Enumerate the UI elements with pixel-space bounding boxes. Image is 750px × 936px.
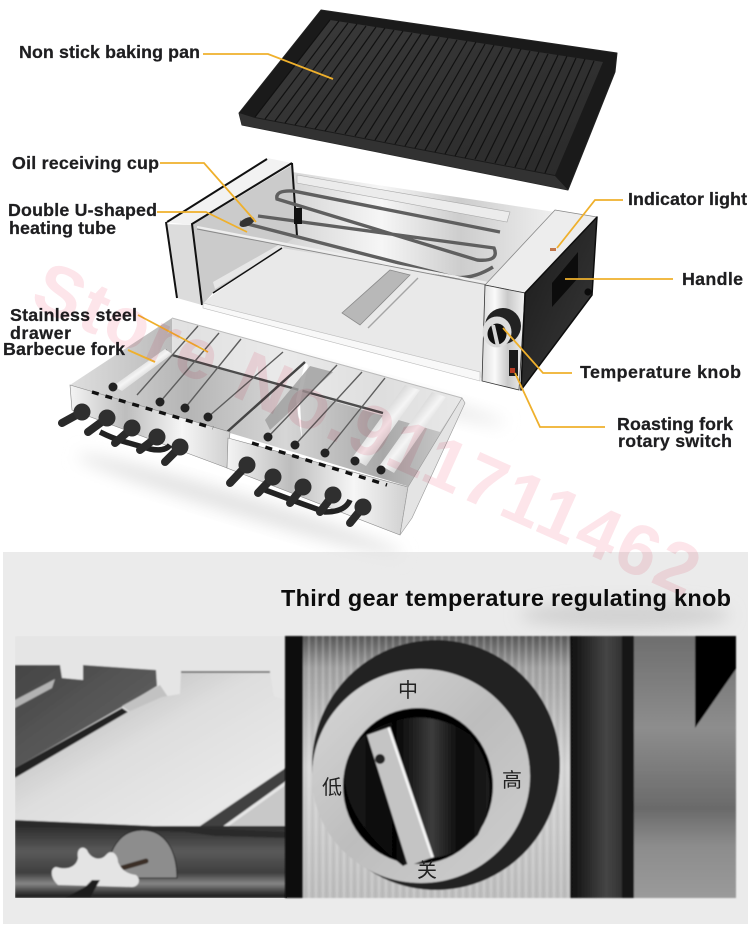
label: oil receiving cup: Oil receiving cup: [12, 153, 159, 173]
photo: temperature knob close-up: [285, 636, 736, 898]
rotary switch: [509, 350, 518, 376]
rollers: [352, 385, 420, 466]
section heading: Third gear temperature regulating knob: [281, 585, 731, 611]
drawer back plate: [172, 318, 462, 432]
label: double U-shaped heating tube: Double U-shaped: [8, 200, 157, 220]
icon: grill body: [165, 158, 597, 432]
fork chains: [100, 432, 350, 512]
label: roasting fork rotary switch: rotary switch: [618, 431, 732, 451]
icon: non stick baking pan: [239, 10, 617, 190]
knob base: [312, 640, 560, 890]
label: temperature knob: Temperature knob: [580, 362, 741, 382]
right control block: [485, 210, 597, 293]
front rail: [203, 303, 480, 381]
label: roasting fork rotary switch: Roasting fork: [617, 414, 733, 434]
fork handles: [62, 412, 363, 523]
knob settings: 高: [502, 764, 522, 793]
label: double U-shaped heating tube: heating tube: [9, 218, 116, 238]
label: handle: Handle: [682, 269, 743, 289]
label: non stick baking pan: Non stick baking pan: [19, 42, 200, 62]
handle slot: [552, 252, 578, 307]
knob settings: 低: [322, 771, 342, 800]
indicator light: [550, 248, 556, 251]
gear wheel: [52, 848, 139, 887]
knob settings: [322, 674, 522, 883]
left end wall: [192, 165, 297, 305]
label: stainless steel drawer: [10, 305, 137, 343]
label: stainless steel drawer: drawer: [10, 323, 71, 343]
watermark: Store No.911711462: [21, 247, 712, 612]
callout lines: [128, 54, 673, 427]
photo: drawer gear close-up: [15, 664, 287, 898]
left end frame: [165, 158, 292, 225]
small knob: [482, 308, 521, 348]
back wall: [240, 172, 555, 290]
forks: [113, 326, 385, 453]
label: indicator light: Indicator light: [628, 189, 747, 209]
heating tubes: [240, 191, 500, 278]
drawer floor: [70, 318, 462, 487]
front plates: [70, 385, 230, 468]
label: stainless steel drawer: Stainless steel: [10, 305, 137, 325]
label: double U-shaped heating tube: [8, 200, 157, 238]
icon: drawer and barbecue forks: [62, 318, 465, 564]
knob grip: [345, 718, 490, 866]
label: barbecue fork: Barbecue fork: [3, 339, 125, 359]
knob settings: 关: [417, 854, 437, 883]
panel: temperature knob section: [3, 552, 748, 924]
label: roasting fork rotary switch: [617, 414, 733, 451]
knob settings: 中: [398, 674, 418, 703]
floor: [203, 248, 500, 378]
